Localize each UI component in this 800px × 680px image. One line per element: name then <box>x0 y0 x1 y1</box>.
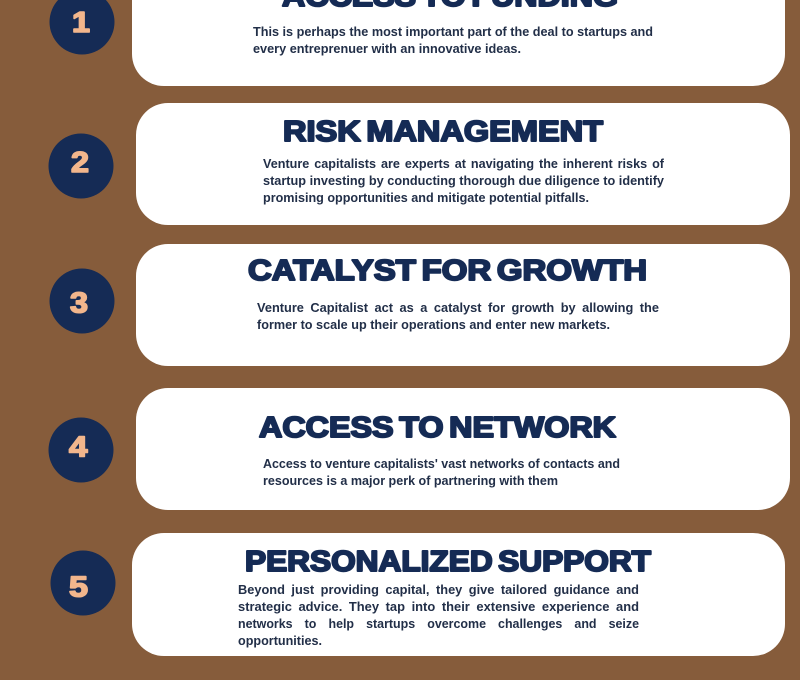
step 4: access to network <box>48 388 790 510</box>
body text 5: networks to help startups overcome challenges and seize <box>238 616 639 631</box>
step 5: personalized support <box>50 533 785 656</box>
body text 1: This is perhaps the most important part of the deal to startups and <box>253 24 653 39</box>
body text 3 <box>257 300 659 332</box>
body text 1 <box>253 24 653 56</box>
heading 3: CATALYST FOR GROWTH <box>248 255 647 287</box>
body text 2: Venture capitalists are experts at navigating the inherent risks of <box>263 156 665 171</box>
body text 5: Beyond just providing capital, they give tailored guidance and <box>238 582 639 597</box>
heading 5: PERSONALIZED SUPPORT <box>245 546 651 578</box>
body text 4 <box>263 456 620 488</box>
heading 2: RISK MANAGEMENT <box>283 116 603 148</box>
badge 3: 3 <box>70 288 88 320</box>
badge 5 <box>50 550 116 616</box>
body text 2 <box>263 156 665 205</box>
card 2 panel <box>136 103 790 225</box>
body text 5: opportunities. <box>238 633 322 648</box>
step 2: risk management <box>48 103 790 225</box>
badge 3 <box>50 268 114 334</box>
badge 1: 1 <box>72 7 90 39</box>
body text 4: Access to venture capitalists' vast networks of contacts and <box>263 456 620 471</box>
body text 2: promising opportunities and mitigate potential pitfalls. <box>263 190 589 205</box>
badge 5: 5 <box>69 572 88 604</box>
body text 1: every entreprenuer with an innovative ideas. <box>253 41 521 56</box>
body text 4: resources is a major perk of partnering with them <box>263 473 558 488</box>
badge 1 <box>50 0 114 54</box>
badge 2 <box>48 134 114 198</box>
heading 4: ACCESS TO NETWORK <box>259 412 616 444</box>
body text 3: former to scale up their operations and enter new markets. <box>257 317 610 332</box>
card 1 panel <box>132 0 785 86</box>
card 5 panel <box>132 533 785 656</box>
badge 4 <box>48 418 114 482</box>
badge 4: 4 <box>69 432 88 464</box>
body text 5: strategic advice. They tap into their extensive experience and <box>238 599 639 614</box>
body text 5 <box>238 582 639 648</box>
step 3: catalyst for growth <box>50 244 790 366</box>
step 1: access to funding <box>50 0 785 86</box>
body text 2: startup investing by conducting thorough due diligence to identify <box>263 173 665 188</box>
card 4 panel <box>136 388 790 510</box>
card 3 panel <box>136 244 790 366</box>
body text 3: Venture Capitalist act as a catalyst for growth by allowing the <box>257 300 659 315</box>
badge 2: 2 <box>71 147 89 179</box>
